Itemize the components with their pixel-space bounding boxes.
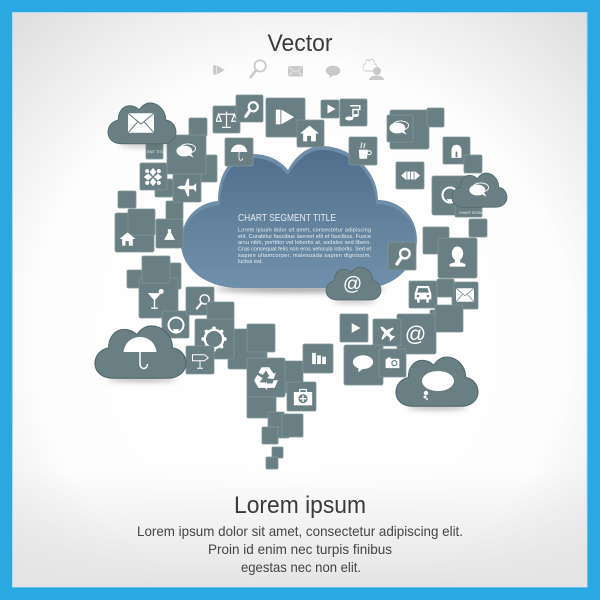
tile: signpost (186, 346, 214, 374)
icon: magnifier (250, 60, 266, 77)
icon: cloud and person (363, 59, 384, 80)
main cloud shadow (215, 285, 385, 293)
text: chart segment body: Cras consequat felis non eros vehicula lobortis. Sed et (238, 246, 371, 252)
tile: behind recycle (282, 361, 303, 393)
tile: cocktail (139, 278, 178, 318)
tile: at sign (397, 314, 436, 354)
tile: small title: ENT TITLE (147, 149, 167, 154)
tile: chat lower (344, 345, 383, 385)
tile: below recycle (247, 395, 276, 418)
tile: chat right (387, 108, 444, 149)
title: Vector: Vector (268, 30, 332, 57)
tile: plain right (435, 305, 463, 332)
tile: coffee (349, 137, 377, 165)
tile: gear (195, 319, 234, 359)
text block: description: egestas nec non elit. (241, 559, 361, 575)
tile: mail right (452, 282, 478, 309)
tile: house (297, 120, 324, 147)
icon: chat (326, 66, 340, 78)
text: chart segment body (238, 228, 371, 265)
tile: magnifier (236, 95, 263, 122)
tile: small title right (455, 197, 482, 217)
icon: play (213, 65, 225, 75)
tile: small behind (430, 310, 440, 328)
tile: arrows (396, 162, 424, 189)
tile: person (438, 238, 477, 278)
text block: description: Lorem ipsum dolor sit amet, consectetur adipiscing elit. (137, 523, 463, 539)
tile: play lower (340, 314, 368, 342)
tile group: right column (423, 219, 487, 254)
top icon row (213, 59, 384, 80)
tile: play (266, 98, 305, 137)
tile: music (340, 99, 367, 126)
tile: small square (464, 155, 482, 173)
tile: refresh (432, 176, 472, 215)
tile: car (409, 281, 437, 308)
text: chart segment body: elit. Curabitur faucibus laoreet elit et faucibus. Fusce (238, 234, 371, 240)
cloud: chat lower right (396, 357, 478, 410)
tile: scales (213, 106, 240, 133)
tile: small title (146, 143, 167, 159)
tile: flask (156, 219, 183, 248)
text: chart segment body: sapien ullamcorper, malesuada sapien dignissim, (238, 253, 371, 259)
tile: recycle (247, 358, 285, 397)
text block: description: Proin id enim nec turpis finibus (208, 541, 392, 557)
icon: mail (288, 66, 303, 76)
tile: small play (321, 100, 339, 118)
tile: plain (142, 256, 170, 283)
tile: airplane (173, 174, 201, 202)
text: chart segment body: luctus est. (238, 259, 263, 265)
tile group: top left (118, 118, 217, 219)
tile: plane (373, 319, 401, 346)
icon collage shaped like a speech bubble (95, 95, 507, 469)
cloud: chat right (452, 173, 507, 207)
tile: chat left (167, 135, 206, 174)
tile: small square mail (437, 279, 454, 297)
tile: umbrella (225, 138, 253, 166)
tile: snowflake (140, 163, 167, 190)
tile: door (443, 137, 470, 164)
tile group: behind gear (207, 302, 275, 369)
text: chart segment body: arcu nibh, porttitor vel lobortis at, sodales sed libero. (238, 240, 371, 246)
tile: camera (379, 349, 406, 377)
tile group: behind cocktail (127, 263, 181, 289)
cloud: mail (108, 103, 176, 147)
tile: magnifier lower (186, 287, 214, 315)
tile: bars (303, 344, 333, 373)
tile: at sign: @ (405, 323, 426, 346)
tile: small title right: CHART SEGM (459, 211, 482, 215)
tile: ring (162, 311, 189, 338)
text block: description (137, 523, 463, 575)
heading: Lorem ipsum: Lorem ipsum (234, 492, 366, 519)
panel: main cloud (181, 146, 417, 288)
cloud: at sign: @ (343, 274, 362, 295)
text: chart segment body: Lorem ipsum dolor sit amet, consectetur adipiscing (238, 228, 371, 234)
text: chart segment title: CHART SEGMENT TITLE (238, 212, 336, 224)
tile group: lower left (115, 209, 155, 252)
cloud: at sign (326, 267, 381, 303)
tile group: bubble tail (262, 412, 303, 469)
tile: magnifier right (388, 242, 416, 270)
tile: first aid (287, 382, 316, 411)
cloud: umbrella (95, 326, 186, 382)
